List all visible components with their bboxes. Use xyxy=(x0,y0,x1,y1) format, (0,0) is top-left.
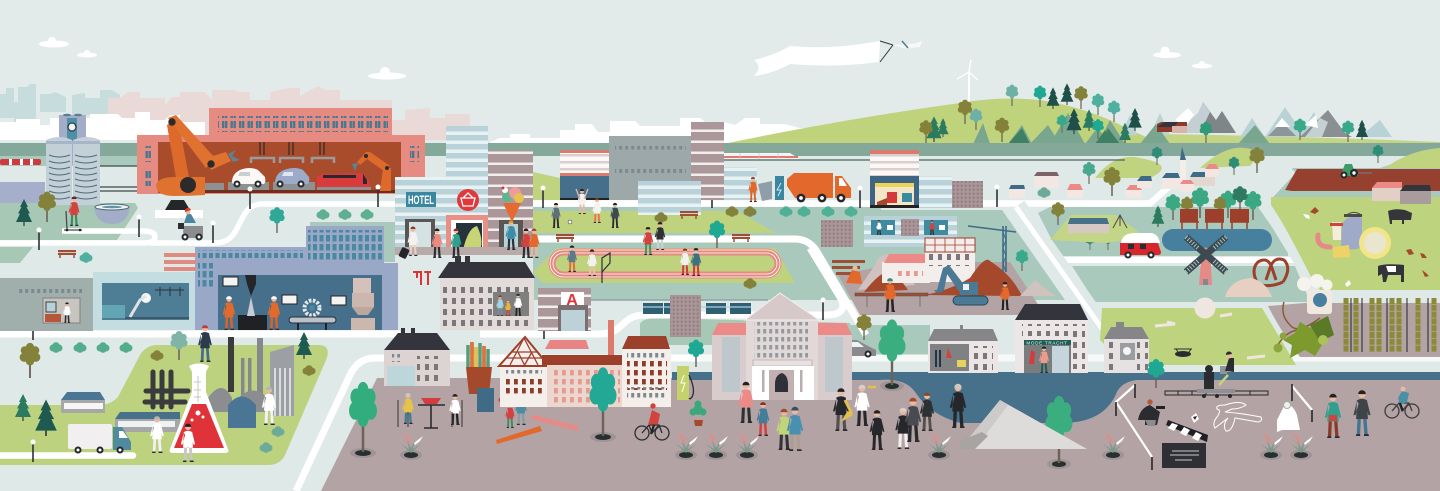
hay bale and hay xyxy=(1155,298,1265,358)
triangular stage xyxy=(960,400,1087,449)
clouds xyxy=(39,37,1212,80)
blue car xyxy=(275,168,309,188)
ice cream xyxy=(502,186,524,222)
brown tower xyxy=(691,122,724,200)
construction site xyxy=(832,226,1055,312)
hills xyxy=(728,99,1440,150)
rails and train at left xyxy=(0,159,137,191)
skyline blue xyxy=(0,84,120,126)
pharmacy: A xyxy=(566,292,578,309)
center blue striped building xyxy=(560,150,609,200)
far forest silhouettes xyxy=(973,113,1270,144)
cafe furniture xyxy=(413,272,431,285)
white car xyxy=(232,168,265,188)
plaza ground xyxy=(321,378,1440,491)
small robot arm xyxy=(352,152,391,191)
grape vine xyxy=(1274,302,1334,358)
pencils on the ground xyxy=(496,415,579,444)
ground zones xyxy=(0,148,1440,355)
musicians xyxy=(833,384,966,450)
pad under robot xyxy=(155,210,203,218)
plaza pad at hotel xyxy=(395,247,535,255)
hall behind flask xyxy=(115,412,180,432)
house cafe xyxy=(384,328,450,386)
scooter rider xyxy=(64,196,82,231)
red train xyxy=(317,173,371,190)
museum xyxy=(712,293,852,400)
office block xyxy=(864,216,957,247)
cows and chickens xyxy=(1303,207,1429,287)
scientists xyxy=(150,387,276,462)
tall house xyxy=(622,336,671,407)
children xyxy=(498,394,527,428)
valley trees xyxy=(1016,145,1383,271)
lower-left trees and bushes xyxy=(15,331,316,453)
lamps xyxy=(30,184,1000,462)
skyline white center xyxy=(490,118,860,150)
potted tree xyxy=(690,400,706,426)
welding room xyxy=(93,272,195,330)
plaza people xyxy=(738,382,803,451)
hotel xyxy=(395,177,447,249)
factory with robots xyxy=(137,108,425,210)
roads xyxy=(0,170,1440,491)
crane xyxy=(968,226,1016,272)
table xyxy=(855,293,928,307)
car behind trees xyxy=(852,340,876,358)
excavator xyxy=(934,265,988,305)
trees center xyxy=(688,314,872,367)
BMW tower xyxy=(46,114,100,205)
skyline pink xyxy=(108,86,470,140)
left green items xyxy=(16,192,374,263)
right pedestrians and cyclist xyxy=(1325,386,1419,438)
shop building xyxy=(870,150,919,208)
ground base xyxy=(0,156,1440,491)
plaza tree three xyxy=(878,319,906,391)
campervan xyxy=(1120,233,1161,258)
sports park furniture xyxy=(556,206,858,289)
pharmacy xyxy=(538,288,591,331)
lawn patch with lodge xyxy=(1050,215,1145,243)
tower with shop xyxy=(446,126,488,250)
light striped blocks xyxy=(638,167,757,215)
road across lawn xyxy=(0,452,133,459)
brown stripe building xyxy=(488,150,533,248)
tractor xyxy=(1340,164,1372,178)
hotel: HOTEL xyxy=(408,195,434,207)
drone xyxy=(1174,349,1192,357)
pipes xyxy=(145,372,188,407)
big bottom-right houses xyxy=(928,304,1149,373)
light striped annex xyxy=(919,176,952,208)
construction ground xyxy=(838,262,1045,315)
moped rider xyxy=(178,208,203,240)
hotel visitors xyxy=(398,220,540,259)
brick factory xyxy=(542,320,623,407)
bin xyxy=(477,388,494,412)
big bottom-right houses: MODE TRACHT xyxy=(1026,341,1068,346)
monorail xyxy=(590,300,768,314)
cyclist red xyxy=(635,403,669,440)
machine and workers xyxy=(223,275,375,330)
house above pharmacy xyxy=(438,256,535,330)
mountains xyxy=(1120,102,1392,137)
garbage truck xyxy=(787,173,851,202)
charging station xyxy=(677,366,693,400)
factory blue building xyxy=(164,226,398,330)
waste collector xyxy=(748,176,784,202)
domes xyxy=(208,388,268,412)
half-timber house xyxy=(499,337,549,407)
windmill xyxy=(1186,237,1226,285)
walking man xyxy=(198,325,212,362)
big robot arm xyxy=(156,115,240,210)
planters xyxy=(400,434,1313,460)
delivery truck xyxy=(68,424,131,454)
plaza tree two xyxy=(590,367,616,442)
high-speed train xyxy=(724,153,1125,160)
skyline white xyxy=(0,112,205,140)
brown grid building xyxy=(952,181,983,208)
track lawn xyxy=(533,248,795,283)
vineyard ground xyxy=(1268,303,1440,357)
film set xyxy=(1116,351,1312,470)
dark green band xyxy=(0,143,1440,156)
food and farm icons xyxy=(1225,212,1391,314)
sports lawn xyxy=(533,211,776,233)
right farm lawn xyxy=(1271,197,1440,290)
red barn xyxy=(1157,122,1187,133)
small hall xyxy=(61,392,105,413)
hill trees xyxy=(919,83,1368,143)
field brown xyxy=(1285,169,1440,191)
cafe table xyxy=(398,393,462,428)
left grey building xyxy=(0,278,93,331)
runners and track athletes xyxy=(567,222,701,283)
museum bowl xyxy=(94,204,130,224)
brown tower front xyxy=(670,295,701,337)
grey office xyxy=(609,136,691,200)
football players xyxy=(551,189,620,228)
flask xyxy=(170,364,228,453)
running track xyxy=(550,250,780,277)
lawn with hay xyxy=(1100,308,1296,365)
tall grey plant xyxy=(270,345,294,416)
vineyard xyxy=(1346,298,1434,352)
plane with banner xyxy=(754,41,922,76)
wind turbine xyxy=(957,60,978,102)
plaza tree one xyxy=(349,382,377,458)
river xyxy=(672,372,1440,423)
lawn bumps xyxy=(533,148,1440,200)
lake and stilt houses xyxy=(1162,186,1272,251)
blue tank xyxy=(228,396,256,428)
pencil cup xyxy=(466,342,492,394)
plaza tree four xyxy=(1046,396,1072,469)
lower-left lawn xyxy=(0,345,328,465)
village xyxy=(1009,147,1219,198)
teal tree by river xyxy=(1147,359,1165,388)
chimneys xyxy=(228,337,263,398)
brown grid block xyxy=(821,220,853,247)
farm buildings xyxy=(1372,182,1431,204)
